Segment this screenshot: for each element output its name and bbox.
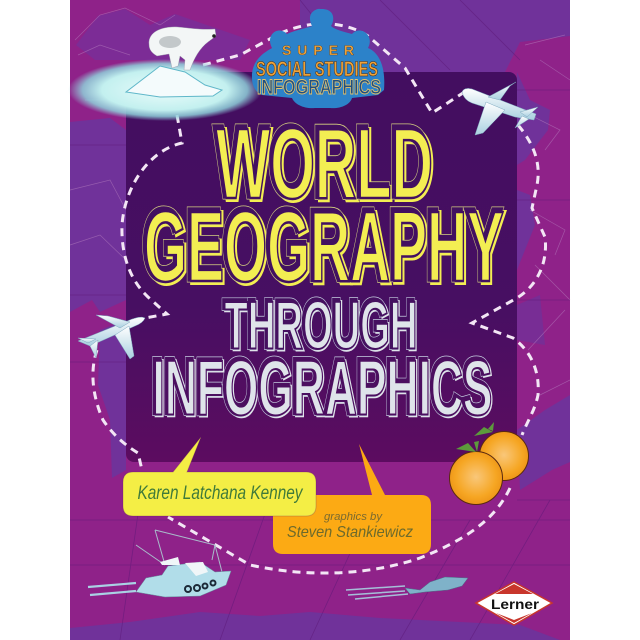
illustrator speech bubble	[273, 444, 431, 554]
title word: THROUGH: THROUGH	[223, 286, 416, 362]
title word: THROUGH	[223, 286, 418, 364]
title word: THROUGH: THROUGH	[225, 288, 418, 364]
fish body	[405, 577, 468, 594]
jumping fish	[346, 577, 468, 599]
polar bear on iceberg	[68, 27, 262, 121]
logo red bottom	[496, 613, 532, 623]
fish wake	[346, 586, 408, 599]
title word: WORLD: WORLD	[217, 109, 434, 221]
title word: WORLD: WORLD	[214, 106, 431, 218]
boat hull	[136, 562, 231, 597]
author speech bubble	[123, 437, 316, 516]
oranges	[450, 422, 528, 504]
back orange	[480, 432, 528, 480]
series badge	[252, 9, 384, 108]
badge line two: SOCIAL STUDIES	[256, 58, 378, 81]
boat wake	[88, 583, 136, 595]
dark title panel	[126, 72, 517, 462]
dashed flight route	[93, 24, 546, 573]
title	[142, 106, 505, 432]
title word: THROUGH: THROUGH	[224, 288, 418, 364]
title word: INFOGRAPHICS	[151, 342, 493, 432]
Lerner logo	[476, 582, 552, 625]
airplane top right	[462, 82, 538, 135]
illustrator name: Steven Stankiewicz	[287, 524, 413, 541]
polar bear	[149, 27, 216, 70]
leaves	[456, 422, 494, 452]
background map	[70, 0, 570, 640]
front orange	[450, 452, 502, 504]
title word: WORLD	[214, 106, 434, 221]
title word: WORLD: WORLD	[216, 108, 433, 220]
iceberg glow	[68, 59, 262, 121]
logo red top	[495, 584, 533, 594]
fishing boat	[88, 530, 231, 597]
illustrator label: graphics by	[324, 511, 384, 523]
iceberg	[126, 66, 222, 97]
logo text: Lerner	[491, 596, 540, 612]
boat rigging	[136, 530, 222, 572]
boat portholes	[185, 580, 216, 592]
boat cabin	[160, 557, 208, 576]
badge line three: INFOGRAPHICS	[257, 76, 381, 99]
title word: THROUGH: THROUGH	[223, 286, 416, 362]
airplane left	[78, 315, 145, 359]
badge line one: SUPER	[282, 42, 354, 58]
logo diamond	[476, 582, 552, 625]
badge silhouette people	[252, 9, 384, 108]
title word: WORLD: WORLD	[214, 106, 431, 218]
author name: Karen Latchana Kenney	[138, 483, 304, 504]
